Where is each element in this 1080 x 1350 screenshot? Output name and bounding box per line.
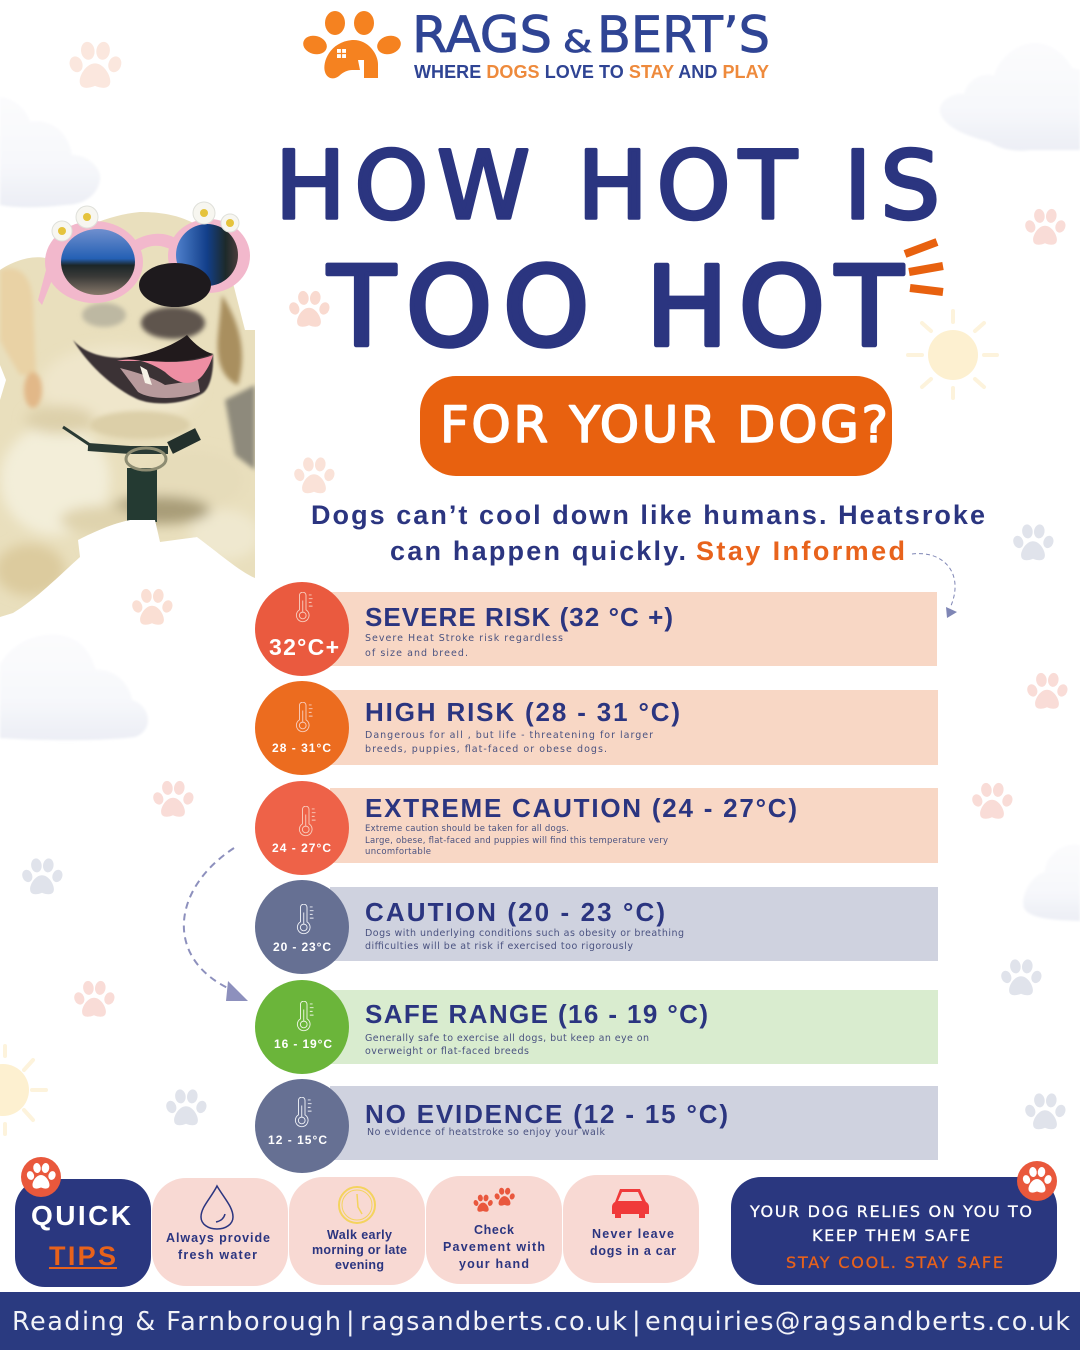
logo [301,6,770,82]
row: extreme caution [255,781,938,875]
logo name: RAGS [412,6,552,64]
row: caution: Dogs with underlying conditions such as obesity or breathing [365,928,684,939]
row: safe range [255,980,938,1074]
dog ears and shadows [0,268,255,470]
row: safe range: SAFE RANGE (16 - 19 °C) [365,999,708,1029]
logo name: & [563,25,592,60]
intro text: Dogs can’t cool down like humans. Heatsroke [311,500,985,530]
tip: car: dogs in a car [590,1244,676,1258]
dog sunglasses [38,219,250,305]
callout: stay safe [731,1161,1057,1285]
tip: walk early [289,1177,425,1285]
row: no evidence [255,1079,938,1173]
callout: stay safe: STAY COOL. STAY SAFE [786,1253,1003,1272]
intro text: can happen quickly. [390,536,686,566]
cloud: upper left [0,97,100,207]
dog harness [63,427,198,522]
dog mouth interior [120,368,200,398]
footer: | [346,1307,355,1337]
row: severe risk: 32°C+ [269,634,339,660]
tip: car: Never leave [592,1227,674,1241]
icon: thermometer [297,904,314,934]
sun: right [908,311,997,398]
row: high risk: breeds, puppies, flat-faced or obese dogs. [365,744,607,755]
footer: | [632,1307,641,1337]
dog nose [139,263,211,307]
intro text [311,500,985,566]
icon: thermometer [295,1097,312,1127]
row: safe range: overweight or flat-faced breeds [365,1046,529,1057]
arrow: dashed right [912,554,957,618]
tip: pavement: Check [474,1223,514,1237]
icon: clock [339,1187,375,1223]
icon: thermometer [299,806,316,836]
icon: thermometer [297,1001,314,1031]
row: no evidence: 12 - 15°C [268,1133,327,1147]
row: caution: 20 - 23°C [273,940,331,954]
row: caution: difficulties will be at risk if exercised too rigorously [365,941,633,952]
row: severe risk: Severe Heat Stroke risk regardless [365,633,563,644]
dog sunglasses daisies [52,202,239,241]
row: safe range: 16 - 19°C [274,1037,332,1051]
background paws [21,41,1069,1129]
dog lower lip [73,340,213,403]
tip: pavement: Pavement with [443,1240,545,1254]
icon: water drop [201,1186,233,1229]
row: extreme caution: EXTREME CAUTION (24 - 27°C) [365,793,797,823]
row: severe risk: SEVERE RISK (32 °C +) [365,602,673,632]
tip: water [152,1178,288,1286]
quick tips badge [15,1157,151,1287]
icon: car [612,1189,649,1218]
tip: water: Always provide [166,1231,270,1245]
dog tooth [140,366,152,385]
row: extreme caution: Large, obese, flat-faced and puppies will find this temperature very [365,836,668,846]
footer [0,1292,1080,1350]
sun: bottom left [0,1046,46,1134]
row: extreme caution: 24 - 27°C [272,841,331,855]
icon: thermometer [296,592,313,622]
heat marks [905,242,943,292]
row: high risk [255,681,938,775]
row: high risk: Dangerous for all , but life - threatening for larger [365,730,653,741]
icon: paws [473,1187,516,1212]
logo name [412,6,770,64]
logo paw icon [301,11,403,78]
tip: water: fresh water [178,1248,257,1262]
row: no evidence: No evidence of heatstroke so enjoy your walk [367,1127,605,1138]
row: high risk: HIGH RISK (28 - 31 °C) [365,697,680,727]
tip: pavement [426,1176,562,1284]
row: severe risk: of size and breed. [365,648,468,659]
row: extreme caution: uncomfortable [365,847,431,857]
row: safe range: Generally safe to exercise all dogs, but keep an eye on [365,1033,649,1044]
title: too hot: TOO HOT [327,243,904,371]
icon: thermometer [296,702,313,732]
cloud: top right [940,43,1080,151]
title: how hot is: HOW HOT IS [275,132,940,241]
tip: car [563,1175,699,1283]
callout: stay safe: KEEP THEM SAFE [812,1226,970,1245]
footer: ragsandberts.co.uk [360,1307,627,1337]
tip: walk early: Walk early [327,1228,392,1242]
row: caution: CAUTION (20 - 23 °C) [365,897,665,927]
pill: for your dog [420,376,892,476]
icon: paw badge [1017,1161,1057,1201]
row: no evidence: NO EVIDENCE (12 - 15 °C) [365,1099,728,1129]
row: severe risk [255,582,937,676]
dog photo [0,200,260,620]
tip: pavement: your hand [459,1257,529,1271]
dog fur shading [0,345,260,596]
footer: Reading & Farnborough [12,1307,341,1337]
cloud: right lower [1023,845,1080,921]
logo tagline: WHERE DOGS LOVE TO STAY AND PLAY [414,62,769,82]
icon: paw badge [21,1157,61,1197]
arrow: dashed left [184,848,248,1001]
quick tips badge: TIPS [49,1241,116,1271]
tip: walk early: morning or late [312,1243,407,1257]
row: high risk: 28 - 31°C [272,741,331,755]
tip: walk early: evening [335,1258,384,1272]
dog tongue [117,355,213,383]
quick tips badge: QUICK [31,1200,131,1231]
footer: enquiries@ragsandberts.co.uk [645,1307,1070,1337]
pill text: FOR YOUR DOG? [440,396,888,454]
row: caution [255,880,938,974]
logo name: BERT’S [597,6,770,64]
intro text: Stay Informed [696,536,905,566]
cloud: left middle [0,634,148,740]
row: extreme caution: Extreme caution should be taken for all dogs. [365,824,569,834]
callout: stay safe: YOUR DOG RELIES ON YOU TO [749,1202,1032,1221]
